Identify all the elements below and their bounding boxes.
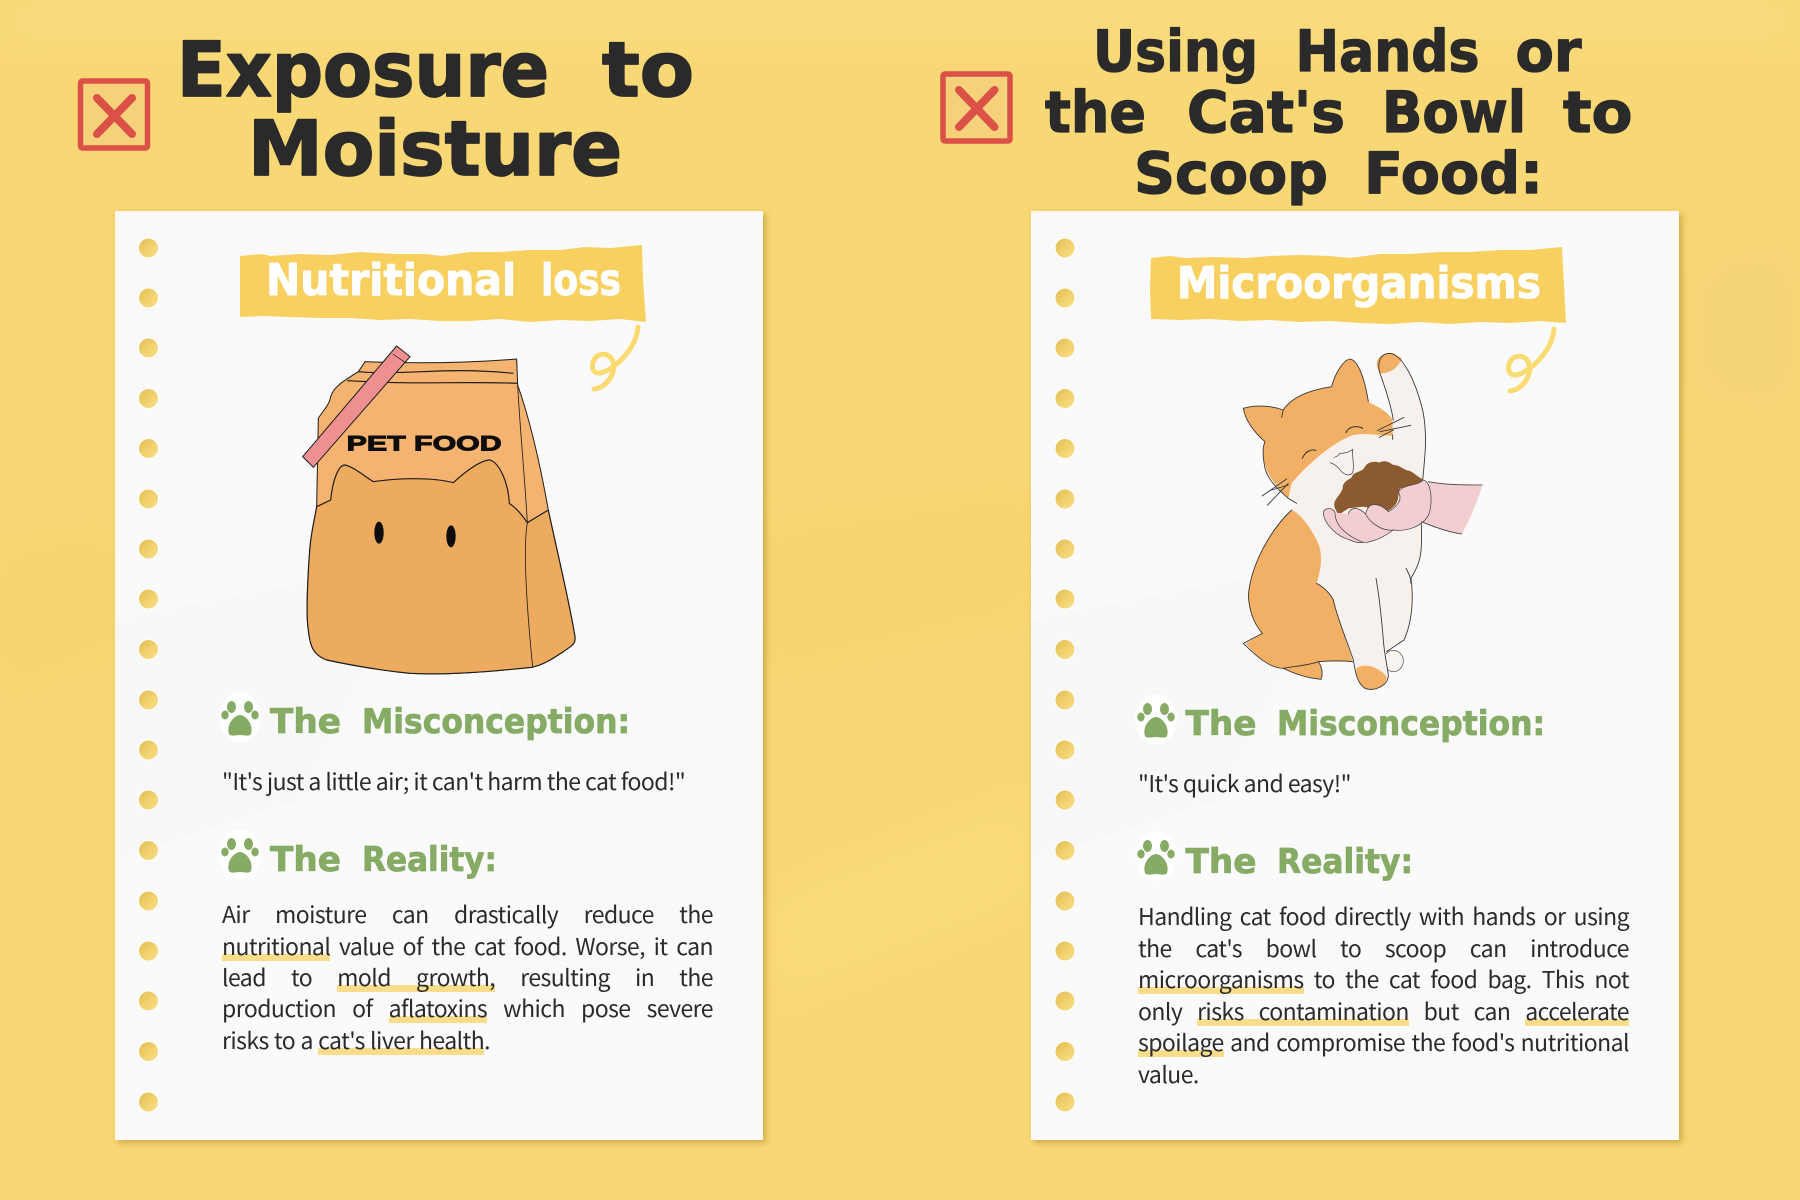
kibble bbox=[1334, 461, 1423, 515]
heading tape: Microorganisms bbox=[1150, 247, 1566, 324]
reality paragraph: lead to mold growth, resulting in the bbox=[222, 959, 713, 993]
title text: Scoop bbox=[1134, 141, 1328, 207]
back foot bbox=[1383, 650, 1403, 672]
heading: The Misconception: The bbox=[1186, 704, 1256, 744]
paper crease texture bbox=[115, 211, 763, 1000]
heading: The Reality: Reality: bbox=[1277, 842, 1413, 882]
hand bbox=[1422, 482, 1482, 534]
reality paragraph: Air moisture can drastically reduce the bbox=[222, 896, 713, 930]
reality paragraph: the cat's bowl to scoop can introduce bbox=[1138, 930, 1629, 964]
panel: Microorganisms bbox=[1031, 211, 1679, 1140]
icon: red X box bbox=[943, 74, 1010, 141]
white body bbox=[1288, 353, 1425, 689]
heading tape: Nutritional loss: loss bbox=[541, 255, 621, 306]
illustration: pet food bag: PET FOOD bbox=[347, 431, 502, 456]
reality paragraph: Handling cat food directly with hands or using bbox=[1138, 898, 1629, 932]
heading: The Reality: The bbox=[270, 840, 341, 880]
icon: paw reality bbox=[219, 829, 261, 879]
heading tape: Nutritional loss bbox=[240, 245, 646, 322]
panel: Nutritional loss bbox=[115, 211, 763, 1140]
squiggle decoration bbox=[592, 327, 638, 389]
title text: Bowl bbox=[1382, 80, 1526, 146]
title text: Moisture bbox=[248, 104, 622, 193]
title text: Food: bbox=[1364, 141, 1543, 207]
misconception quote: "It's just a little air; it can't harm the cat food!" bbox=[222, 763, 685, 797]
heading: The Misconception: Misconception: bbox=[1277, 704, 1545, 744]
reality paragraph bbox=[1138, 898, 1630, 1090]
heading: The Reality: Reality: bbox=[362, 840, 497, 880]
title text: to bbox=[1563, 80, 1632, 146]
paper crease texture bbox=[1031, 211, 1679, 1000]
title text: Exposure bbox=[177, 25, 549, 114]
title text: Hands bbox=[1296, 19, 1480, 85]
orange paw tips bbox=[1356, 666, 1387, 689]
reality paragraph: microorganisms to the cat food bag. This not bbox=[1138, 961, 1629, 995]
reality paragraph: risks to a cat's liver health. bbox=[222, 1022, 490, 1056]
reality paragraph: nutritional value of the cat food. Worse, it can bbox=[222, 928, 713, 962]
icon: paw misconception bbox=[219, 692, 261, 742]
heading tape: Microorganisms: Microorganisms bbox=[1177, 258, 1541, 309]
heading tape: Nutritional loss: Nutritional bbox=[266, 255, 516, 306]
heading: The Misconception: Misconception: bbox=[362, 702, 630, 742]
title text: the bbox=[1045, 80, 1146, 146]
reality paragraph: value. bbox=[1138, 1056, 1199, 1090]
title text bbox=[177, 25, 694, 193]
reality paragraph: spoilage and compromise the food's nutritional bbox=[1138, 1024, 1629, 1058]
binder holes bbox=[138, 238, 158, 1112]
pink strip bbox=[303, 346, 410, 467]
outlines bbox=[1243, 353, 1425, 689]
title block: Using Hands or the Cat's Bowl to Scoop Food bbox=[940, 19, 1632, 207]
reality paragraph: production of aflatoxins which pose severe bbox=[222, 990, 713, 1024]
heading: The Misconception: The bbox=[270, 702, 341, 742]
title text: Using bbox=[1093, 19, 1258, 85]
title text bbox=[1045, 19, 1632, 207]
icon: paw reality bbox=[1135, 831, 1177, 881]
illustration: pet food bag bbox=[303, 346, 575, 674]
heading: The Reality bbox=[270, 840, 497, 880]
title block: Exposure to Moisture bbox=[78, 25, 694, 193]
misconception quote: "It's quick and easy!" bbox=[1138, 765, 1351, 799]
icon: paw misconception bbox=[1135, 694, 1177, 744]
squiggle decoration bbox=[1508, 329, 1554, 391]
orange head bbox=[1243, 359, 1393, 498]
orange body bbox=[1246, 510, 1353, 679]
binder holes bbox=[1055, 238, 1075, 1112]
reality paragraph bbox=[222, 896, 713, 1056]
title text: or bbox=[1516, 19, 1582, 85]
reality paragraph: only risks contamination but can accelerate bbox=[1138, 992, 1629, 1026]
icon: red X box bbox=[80, 81, 148, 148]
heading: The Reality bbox=[1186, 842, 1413, 882]
title text: Cat's bbox=[1187, 80, 1345, 146]
heading: The Reality: The bbox=[1186, 842, 1256, 882]
title text: to bbox=[602, 25, 694, 114]
illustration: cat eating from hand bbox=[1243, 353, 1482, 689]
